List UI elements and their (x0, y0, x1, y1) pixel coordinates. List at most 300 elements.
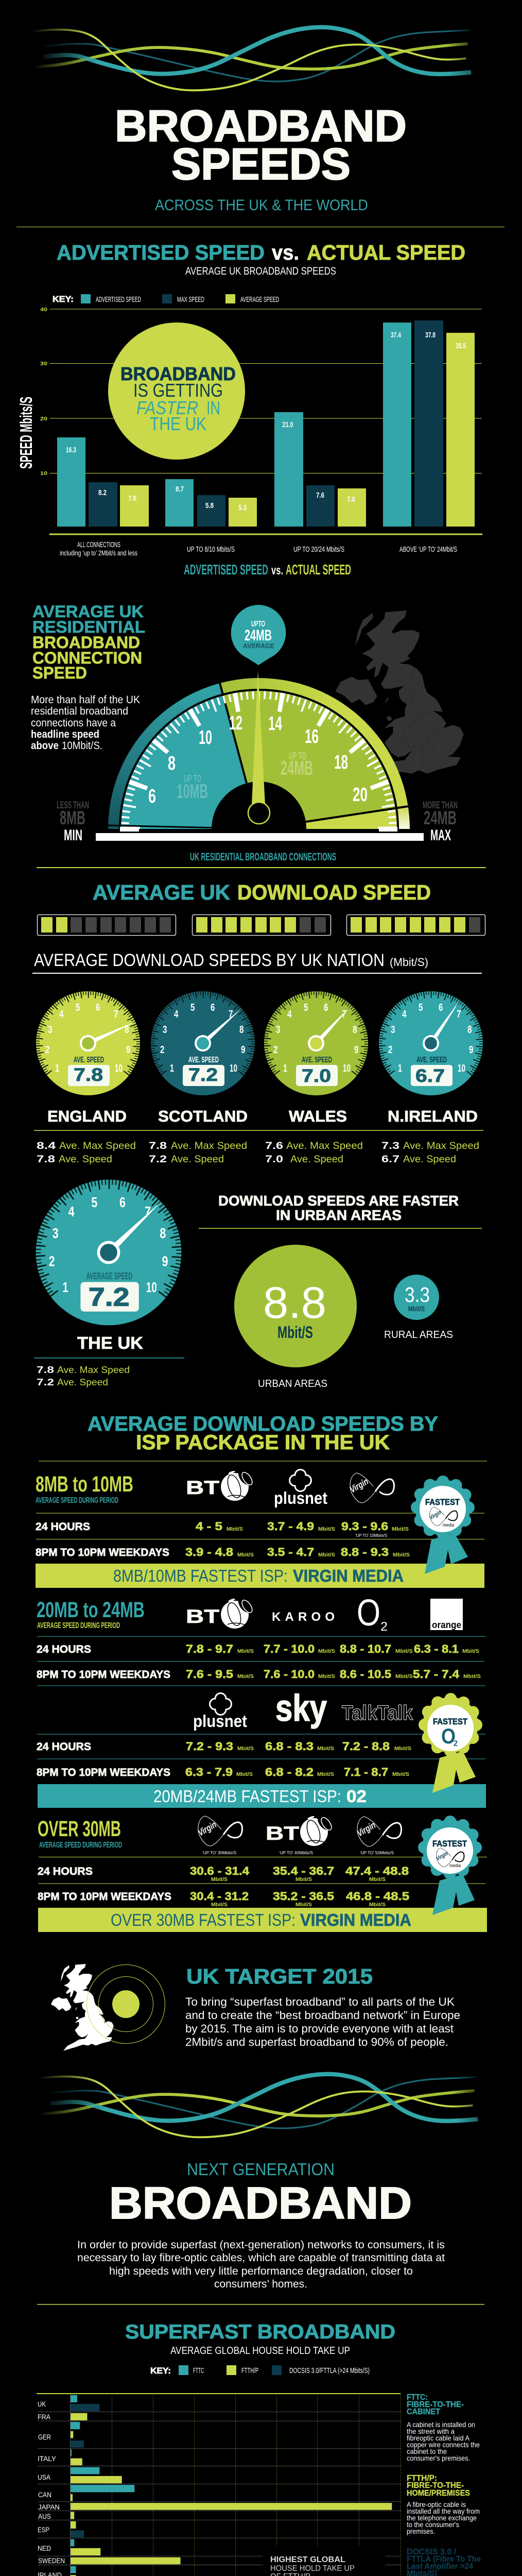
dial: N. Ireland: 4 (402, 1009, 407, 1020)
horizontal bar chart: superfast broadband: USA (38, 2473, 51, 2481)
key: superfast: DOCSIS 3.0/FTTLA (>24 Mbits/S) (289, 2366, 370, 2375)
dial: Scotland: 9 (241, 1044, 245, 1056)
speedometer gauge: 18 (334, 752, 348, 773)
dial: N. Ireland: 9 (469, 1044, 474, 1056)
UK map grey (336, 611, 464, 784)
horizontal bar chart: superfast broadband (37, 2393, 408, 2576)
panel: over 30MB: 24 HOURS (38, 1866, 93, 1877)
sidebar: DOCSIS: FTTLA (Fibre To The (407, 2555, 481, 2564)
panel: 20MB to 24MB: Mbit/S (318, 1648, 335, 1654)
bar chart: advertised vs actual speed: 5.3 (238, 503, 247, 512)
bar chart: advertised vs actual speed: 10 (40, 471, 48, 477)
logo: Virgin (355, 1817, 401, 1846)
dial: England: 1 (55, 1063, 59, 1074)
bar chart: advertised vs actual speed: 8.7 (176, 485, 184, 494)
panel: 20MB to 24MB: 7.2 - 9.3 (186, 1740, 233, 1753)
panel: 20MB to 24MB: Mbit/S (237, 1745, 254, 1752)
banner: 8MB/10MB fastest ISP: 8MB/10MB FASTEST ISP: (113, 1566, 288, 1585)
heading: ISP package: AVERAGE DOWNLOAD SPEEDS BY (88, 1413, 438, 1435)
key: superfast (150, 2365, 370, 2376)
panel: over 30MB: Mbit/S (369, 1902, 386, 1908)
sidebar: FTTH/P: to the consumer's (407, 2520, 459, 2529)
panel: 8MB to 10MB: Mbit/S (227, 1526, 243, 1532)
speedometer gauge: 8 (168, 753, 176, 774)
subheading: AVERAGE UK BROADBAND SPEEDS (185, 265, 336, 277)
logo: Virgin (196, 1816, 242, 1846)
inset table: highest FTTH/P take up: HIGHEST GLOBAL (270, 2555, 345, 2564)
dial: England: 10 (115, 1063, 123, 1074)
horizontal bar chart: superfast broadband: ITALY (38, 2454, 57, 2463)
panel: 20MB to 24MB: 7.2 - 8.8 (342, 1740, 390, 1753)
dial: England: 4 (59, 1009, 64, 1020)
panel: over 30MB: ‘UP TO’ 30Mbits/S (202, 1851, 236, 1855)
inset table: highest FTTH/P take up (263, 2546, 385, 2576)
dial: Scotland (151, 991, 255, 1095)
body text: headline speed (31, 728, 99, 740)
logo: TalkTalk: TalkTalk (342, 1702, 413, 1724)
rosette: O2: FASTEST (433, 1717, 468, 1726)
panel: 8MB to 10MB (36, 1464, 484, 1588)
target body text: To bring “superfast broadband” to all parts of the UK (185, 1995, 455, 2008)
pin: up to 24MB average (231, 605, 286, 665)
nation stats: 7.3 (381, 1141, 399, 1151)
horizontal bar chart: superfast broadband: AUS (38, 2512, 51, 2520)
UK stats: 7.8 (37, 1365, 54, 1375)
horizontal bar chart: superfast broadband: GER (38, 2433, 51, 2441)
banner: 20MB/24MB fastest ISP (38, 1784, 486, 1808)
dial: N. Ireland: 3 (391, 1024, 395, 1036)
heading: residential connection speed: CONNECTION (32, 649, 142, 667)
sidebar: FTTH/P: installed all the way from (407, 2507, 480, 2515)
dial: Wales: 1 (283, 1063, 287, 1074)
panel: 20MB to 24MB: Mbit/S (395, 1673, 413, 1680)
dial: Wales: 8 (353, 1024, 357, 1036)
speedometer gauge: 10 (199, 727, 212, 749)
dial: England: 7 (114, 1009, 118, 1020)
wave decoration top (31, 27, 471, 90)
rosette: Virgin Media: FASTEST (432, 1839, 467, 1849)
rosette: Virgin Media (422, 1820, 478, 1915)
bar chart: advertised vs actual speed (40, 307, 482, 535)
panel: 20MB to 24MB (37, 1592, 486, 1808)
UK stats (34, 1333, 184, 1387)
panel: over 30MB: 30.6 - 31.4 (190, 1865, 250, 1877)
dial: Wales: 9 (354, 1044, 358, 1056)
next generation paragraph: consumers’ homes. (214, 2278, 307, 2290)
heading: urban areas: IN URBAN AREAS (276, 1207, 402, 1223)
dial: N. Ireland: 2 (388, 1044, 392, 1056)
dial: Wales: AVE. SPEED (302, 1056, 332, 1064)
rural circle (384, 1275, 453, 1341)
wave decoration middle (38, 2074, 478, 2137)
target body text: and to create the “best broadband network” in Europe (185, 2009, 460, 2022)
bar chart: advertised vs actual speed: 21.0 (282, 420, 293, 429)
nation stats: 7.8 (37, 1154, 55, 1165)
logo: Virgin: Virgin (196, 1819, 218, 1838)
dial: the UK: 8 (160, 1225, 166, 1241)
logo: Sky: sky (275, 1688, 327, 1729)
panel: 20MB to 24MB: Mbit/S (392, 1771, 409, 1777)
dial: the UK: 4 (68, 1204, 75, 1219)
pin: up to 24MB average: AVERAGE (243, 642, 274, 650)
logo: BT: BT (186, 1477, 220, 1498)
chart key (53, 294, 279, 304)
panel: 20MB to 24MB: 8.6 - 10.5 (340, 1668, 391, 1681)
panel: 20MB to 24MB: 7.7 - 10.0 (264, 1642, 315, 1655)
next generation paragraph: necessary to lay fibre-optic cables, which are capable of transmitting data at (77, 2252, 445, 2264)
body text: 10Mbit/S. (62, 740, 102, 752)
panel: over 30MB: ‘UP TO’ 50Mbits/S (360, 1851, 394, 1855)
nation stats: 6.7 (381, 1154, 399, 1165)
rosette: O2 (423, 1697, 478, 1793)
gauge scale labels: MIN (64, 827, 82, 844)
bar chart: advertised vs actual speed: 20 (40, 416, 48, 422)
bar chart: advertised vs actual speed: 5.8 (205, 501, 214, 510)
panel: 20MB to 24MB: 8PM TO 10PM WEEKDAYS (37, 1767, 170, 1778)
panel: 8MB to 10MB: 8PM TO 10PM WEEKDAYS (36, 1547, 169, 1558)
panel: over 30MB: 35.2 - 36.5 (273, 1890, 334, 1903)
pin: up to 24MB average: UPTO (251, 620, 265, 629)
horizontal bar chart: superfast broadband: NED (38, 2544, 51, 2552)
heading: next generation broadband: NEXT GENERATION (187, 2160, 335, 2179)
panel: 20MB to 24MB: 7.8 - 9.7 (186, 1642, 233, 1655)
horizontal bar chart: superfast broadband: FRA (38, 2413, 51, 2421)
heading: residential connection speed: AVERAGE UK (32, 602, 144, 621)
bar chart: advertised vs actual speed: 7.6 (128, 494, 136, 503)
heading: advertised vs actual: ACTUAL SPEED (307, 241, 465, 264)
nation stats: 7.2 (149, 1154, 167, 1165)
panel: 20MB to 24MB: 6.8 - 8.2 (265, 1766, 314, 1778)
panel: 20MB to 24MB: 24 HOURS (37, 1643, 91, 1655)
dial: Wales: 3 (276, 1024, 280, 1036)
next generation paragraph: high speeds with very little performance degradation, closer to (109, 2265, 413, 2277)
logo: Orange (430, 1599, 463, 1630)
sidebar: FTTC: copper wire connects the (407, 2441, 480, 2449)
dial: Scotland: 6 (211, 1002, 215, 1013)
dial: N. Ireland: 5 (419, 1002, 423, 1013)
nation stats (37, 1141, 479, 1165)
speedometer gauge: UP TO (289, 751, 306, 762)
dial: Scotland: 8 (239, 1024, 244, 1036)
dial: Scotland: 2 (160, 1044, 165, 1056)
sidebar: FTTC (407, 2393, 480, 2462)
panel: over 30MB: Mbit/S (369, 1876, 386, 1883)
dial: the UK: 5 (91, 1194, 97, 1210)
speedometer gauge (107, 670, 410, 832)
dial: the UK: 1 (62, 1279, 68, 1295)
callout circle: broadband is getting faster: THE UK (150, 413, 206, 434)
rosette: Virgin Media: Virgin (429, 1510, 442, 1521)
panel: 8MB to 10MB: Mbit/S (318, 1552, 335, 1558)
panel: 8MB to 10MB: 3.7 - 4.9 (267, 1520, 314, 1533)
panel: over 30MB: AVERAGE SPEED DURING PERIOD (39, 1841, 122, 1850)
rosette: Virgin Media: media (443, 1522, 454, 1528)
dial: England: 9 (126, 1044, 131, 1056)
logo: BT (186, 1464, 257, 1501)
horizontal bar chart: superfast broadband: SWEDEN (38, 2556, 65, 2565)
key: superfast: FTTH/P (241, 2366, 258, 2375)
title: SPEEDS (171, 140, 351, 189)
panel: over 30MB: Mbit/S (295, 1902, 312, 1908)
dial: the UK: 10 (146, 1279, 157, 1295)
panel: 20MB to 24MB: AVERAGE SPEED DURING PERIOD (37, 1621, 120, 1630)
x-axis category labels: UP TO 20/24 Mbits/S (293, 545, 344, 554)
dial: England: 2 (45, 1044, 49, 1056)
sidebar: FTTC: the street with a (407, 2427, 455, 2435)
nation stats: 7.0 (265, 1154, 283, 1165)
x-axis category labels: including ‘up to’ 2Mbit/s and less (60, 549, 137, 557)
panel: 8MB to 10MB: 8.8 - 9.3 (341, 1546, 389, 1558)
progress bars (37, 915, 485, 936)
logo: plusnet: plusnet (274, 1488, 327, 1507)
x-axis category labels: UP TO 8/10 Mbits/S (187, 545, 235, 554)
dial: England: 3 (48, 1024, 53, 1036)
speedometer gauge: UP TO (184, 773, 201, 785)
nation names: WALES (289, 1107, 347, 1125)
banner: over 30MB fastest ISP (38, 1908, 487, 1932)
panel: 8MB to 10MB: 4 - 5 (196, 1520, 222, 1533)
rural circle: 3.3 (405, 1283, 430, 1307)
panel: 20MB to 24MB: Mbit/S (462, 1648, 479, 1654)
panel: 20MB to 24MB: 7.6 - 10.0 (264, 1668, 315, 1681)
nation stats: Ave. Max Speed (171, 1141, 247, 1151)
panel: over 30MB: Mbit/S (211, 1876, 228, 1883)
heading: residential connection speed: BROADBAND (32, 633, 140, 652)
sidebar: DOCSIS: Last Amplifier >24 (407, 2562, 473, 2571)
panel: 8MB to 10MB: 8MB to 10MB (36, 1472, 133, 1497)
chart caption: ACTUAL SPEED (286, 562, 351, 578)
logo: Virgin: Virgin (348, 1476, 370, 1495)
bar chart: advertised vs actual speed: 8.2 (98, 488, 107, 497)
urban circle (234, 1245, 357, 1389)
axis label: SPEED Mbits/S (16, 397, 36, 469)
dial: Scotland: 7 (229, 1009, 233, 1020)
sidebar: FTTC: fibreoptic cable laid A (407, 2434, 470, 2442)
panel: over 30MB: OVER 30MB (38, 1817, 121, 1841)
rosette: Virgin Media: media (449, 1863, 461, 1868)
gauge scale labels: LESS THAN (57, 800, 89, 811)
nation stats: Ave. Speed (290, 1154, 343, 1165)
bar chart: advertised vs actual speed: 35.5 (456, 342, 466, 350)
banner: 20MB/24MB fastest ISP: 02 (346, 1787, 367, 1806)
callout circle: broadband is getting faster: IS GETTING (133, 380, 223, 401)
dial: England: 8 (125, 1024, 129, 1036)
gauge scale labels: MAX (430, 827, 451, 844)
next generation paragraph: In order to provide superfast (next-generation) networks to consumers, it is (77, 2239, 445, 2251)
subheading: by UK nation: AVERAGE DOWNLOAD SPEEDS BY UK NATION (34, 951, 385, 970)
dial: England: 6 (96, 1002, 100, 1013)
logo: BT (266, 1809, 337, 1846)
speedometer gauge: 14 (268, 713, 282, 735)
speedometer gauge: 20 (353, 784, 368, 806)
key: superfast: FTTC (193, 2366, 204, 2375)
sidebar: FTTH/P: FIBRE-TO-THE- (407, 2481, 464, 2490)
logo: Virgin: Virgin (355, 1820, 377, 1838)
panel: 20MB to 24MB: 6.8 - 8.3 (265, 1740, 314, 1753)
dial: Wales: 10 (343, 1063, 351, 1074)
panel: 8MB to 10MB: 3.9 - 4.8 (185, 1546, 233, 1558)
callout circle: broadband is getting faster (108, 323, 245, 460)
sidebar: FTTH/P: premises. (407, 2527, 435, 2535)
dial: Scotland: 10 (230, 1063, 237, 1074)
banner: 8MB/10MB fastest ISP: VIRGIN MEDIA (293, 1566, 404, 1585)
nation stats: Ave. Speed (59, 1154, 112, 1165)
dial: Wales: 4 (287, 1009, 292, 1020)
panel: over 30MB (38, 1809, 487, 1932)
dial: Scotland: 1 (170, 1063, 174, 1074)
panel: 20MB to 24MB: 24 HOURS (37, 1741, 91, 1753)
nation stats: 7.8 (149, 1141, 167, 1151)
rural circle: Mbit/S (408, 1304, 425, 1313)
dial: N. Ireland: AVE. SPEED (416, 1056, 447, 1064)
panel: 8MB to 10MB: AVERAGE SPEED DURING PERIOD (36, 1496, 118, 1505)
panel: 20MB to 24MB: 7.1 - 8.7 (344, 1766, 388, 1778)
dial: the UK: 3 (53, 1225, 59, 1241)
logo: BT: BT (266, 1823, 300, 1844)
heading: urban areas: DOWNLOAD SPEEDS ARE FASTER (218, 1193, 459, 1209)
heading: next generation broadband: BROADBAND (109, 2178, 412, 2228)
horizontal bar chart: superfast broadband: JAPAN (38, 2503, 60, 2511)
dial: Scotland: 4 (174, 1009, 179, 1020)
target body text: 2Mbit/s and superfast broadband to 90% of people. (185, 2036, 448, 2048)
sidebar: FTTC: cabinet to the (407, 2447, 447, 2455)
rosette: O2: O (441, 1724, 456, 1748)
banner: 8MB/10MB fastest ISP (36, 1564, 484, 1588)
heading: advertised vs actual: ADVERTISED SPEED (57, 241, 265, 264)
logo: BT: BT (186, 1606, 220, 1627)
UK stats: Ave. Max Speed (57, 1365, 130, 1375)
sidebar: FTTC: CABINET (407, 2408, 440, 2416)
panel: over 30MB: 8PM TO 10PM WEEKDAYS (38, 1891, 171, 1903)
dial: Scotland: 5 (190, 1002, 195, 1013)
panel: 8MB to 10MB: Mbit/S (318, 1526, 335, 1532)
chart key: ADVERTISED SPEED (96, 295, 141, 304)
dial: the UK: 7.2 (89, 1282, 130, 1312)
urban circle: Mbit/S (277, 1323, 313, 1342)
logo: Orange: orange (432, 1620, 461, 1630)
nation stats: Ave. Speed (171, 1154, 224, 1165)
sidebar: FTTH/P (407, 2474, 480, 2535)
gauge caption: UK RESIDENTIAL BROADBAND CONNECTIONS (190, 851, 336, 863)
sidebar: DOCSIS (407, 2548, 481, 2576)
x-axis category labels: ALL CONNECTIONS (77, 540, 120, 549)
nation names: SCOTLAND (158, 1107, 248, 1125)
horizontal bar chart: superfast broadband: CAN (38, 2490, 51, 2499)
logo: plusnet: plusnet (193, 1711, 247, 1731)
panel: 8MB to 10MB: Mbit/S (237, 1552, 254, 1558)
chart caption: vs. (271, 564, 283, 578)
dial: Wales: 7 (342, 1009, 346, 1020)
nation stats: Ave. Max Speed (59, 1141, 136, 1151)
heading: residential connection speed: SPEED (32, 664, 87, 682)
panel: 20MB to 24MB: 6.3 - 7.9 (185, 1766, 233, 1778)
callout circle: broadband is getting faster: FASTER (136, 397, 198, 418)
key: superfast: KEY: (150, 2366, 171, 2376)
panel: over 30MB: 46.8 - 48.5 (346, 1890, 409, 1903)
panel: 20MB to 24MB: Mbit/S (318, 1673, 335, 1680)
heading: superfast broadband: SUPERFAST BROADBAND (125, 2321, 395, 2343)
panel: 8MB to 10MB: Mbit/S (392, 1526, 409, 1532)
body text (31, 694, 140, 752)
rosette: Virgin Media: Virgin (436, 1851, 449, 1862)
panel: 20MB to 24MB: 8PM TO 10PM WEEKDAYS (37, 1669, 170, 1681)
panel: 20MB to 24MB: Mbit/S (237, 1648, 254, 1654)
x-axis category labels: ABOVE ‘UP TO’ 24Mbit/S (399, 545, 457, 554)
dial: England: 7.8 (74, 1065, 103, 1085)
logo: plusnet (274, 1469, 327, 1507)
body text: connections have a (31, 717, 116, 729)
heading: average UK download speed (93, 880, 431, 904)
chart key: MAX SPEED (177, 295, 204, 304)
sidebar: FTTH/P: HOME/PREMISES (407, 2489, 470, 2498)
panel: 8MB to 10MB: Mbit/S (393, 1552, 410, 1558)
panel: 8MB to 10MB: 3.5 - 4.7 (267, 1546, 314, 1558)
dial: Scotland: 3 (163, 1024, 167, 1036)
gauge scale labels: MORE THAN (423, 800, 458, 811)
dial: Wales (264, 991, 368, 1095)
dial: N. Ireland: 6 (439, 1002, 443, 1013)
rural circle: RURAL AREAS (384, 1329, 453, 1341)
heading: ISP package: ISP PACKAGE IN THE UK (136, 1431, 390, 1454)
dial: N. Ireland (379, 991, 483, 1095)
dial: Scotland: 7.2 (188, 1065, 218, 1085)
callout circle: broadband is getting faster: IN (206, 397, 220, 418)
heading: superfast broadband (125, 2321, 395, 2357)
speedometer gauge: 6 (148, 786, 156, 807)
x-axis category labels (60, 540, 457, 557)
dial: the UK: 2 (49, 1253, 55, 1269)
dial: England: 5 (76, 1002, 80, 1013)
panel: 20MB to 24MB: Mbit/S (317, 1745, 334, 1752)
pin: up to 24MB average: 24MB (245, 627, 272, 644)
rosette: Virgin Media (415, 1480, 471, 1574)
panel: over 30MB: 47.4 - 48.8 (345, 1865, 409, 1877)
nation stats: Ave. Speed (403, 1154, 456, 1165)
dial: N. Ireland: 7 (457, 1009, 461, 1020)
dial: Wales: 2 (273, 1044, 278, 1056)
gauge scale labels: 8MB (60, 807, 85, 828)
next generation paragraph (77, 2239, 445, 2290)
sidebar: FTTC: A cabinet is installed on (407, 2420, 475, 2429)
dial: the UK: AVERAGE SPEED (86, 1271, 132, 1281)
icon: UK map with target rings (51, 1964, 165, 2050)
body text: More than half of the UK (31, 694, 140, 706)
logo: Karoo: KAROO (272, 1610, 335, 1624)
sidebar: FTTC: consumer's premises. (407, 2454, 470, 2462)
heading: average UK download speed: AVERAGE UK (93, 880, 230, 904)
sidebar: FTTH/P: A fibre-optic cable is (407, 2500, 466, 2509)
dial: Wales: 5 (304, 1002, 308, 1013)
dial: England: AVE. SPEED (74, 1056, 104, 1064)
dial: the UK: 6 (119, 1194, 126, 1210)
panel: over 30MB: Mbit/S (295, 1876, 312, 1883)
heading: advertised vs actual: vs. (272, 241, 299, 264)
speedometer gauge: 12 (229, 713, 242, 734)
banner: over 30MB fastest ISP: VIRGIN MEDIA (300, 1910, 411, 1929)
UK stats: 7.2 (37, 1377, 54, 1387)
dial: Wales: 6 (324, 1002, 328, 1013)
rosette: Virgin Media: FASTEST (425, 1497, 460, 1507)
panel: 20MB to 24MB: 5.7 - 7.4 (413, 1668, 460, 1681)
bar chart: advertised vs actual speed: 7.6 (316, 491, 324, 500)
logo: Virgin (348, 1473, 394, 1503)
panel: 20MB to 24MB: Mbit/S (463, 1673, 481, 1680)
nation names (34, 1107, 483, 1131)
bar chart: advertised vs actual speed: 7.0 (347, 495, 355, 504)
title: BROADBAND (115, 101, 407, 151)
subheading: by UK nation: (Mbit/S) (390, 956, 428, 969)
panel: 20MB to 24MB: 20MB to 24MB (37, 1598, 145, 1622)
